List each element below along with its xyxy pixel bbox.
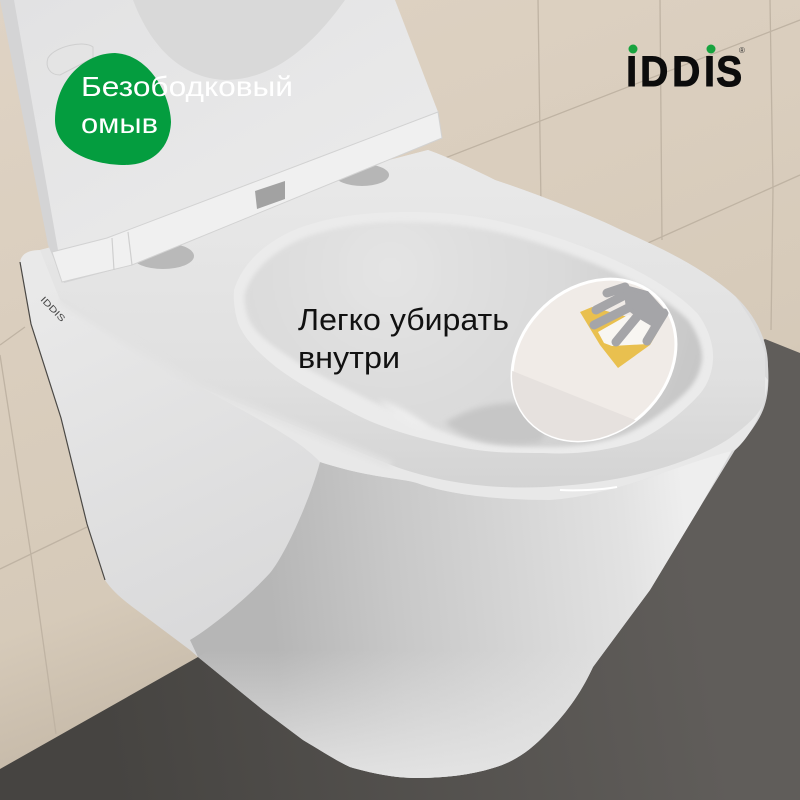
logo wordmark: IDDIS [626,47,742,95]
badge text: Безободковый [81,71,293,102]
body silhouette, side surface [20,150,768,778]
floor [0,339,800,800]
soft rim crease [60,300,391,465]
toilet lid [0,0,442,283]
bowl outlet [445,403,560,444]
lid bumper [47,44,93,75]
lower body brightening [198,630,620,778]
inset lower ledge [512,371,636,441]
glove [594,287,665,342]
dark back edge [20,262,105,580]
logo [626,44,745,95]
bowl interior [245,222,702,447]
seat hinges [132,164,389,269]
bowl reflection [378,400,430,429]
green badge [55,53,171,165]
front surface of body [190,445,735,778]
logo dots [628,44,716,54]
bowl lip [234,212,713,453]
lid oval cut-out [133,0,345,80]
brand mark on body: IDDIS [39,294,67,324]
rim top surface [40,150,765,488]
badge text: омыв [81,108,158,139]
rim lip highlight [560,487,617,490]
toilet body [20,150,768,778]
inset circle: cleaning detail [510,278,678,442]
hinge barrel joint [112,232,132,270]
callout text: Легко убирать [298,302,509,337]
sponge [580,307,657,368]
hinge bar [52,112,442,282]
logo registered: ® [739,46,745,55]
sponge white layer [598,315,650,346]
rim lip [200,300,768,500]
callout text: внутри [298,340,400,375]
lid metal clip [255,181,285,209]
